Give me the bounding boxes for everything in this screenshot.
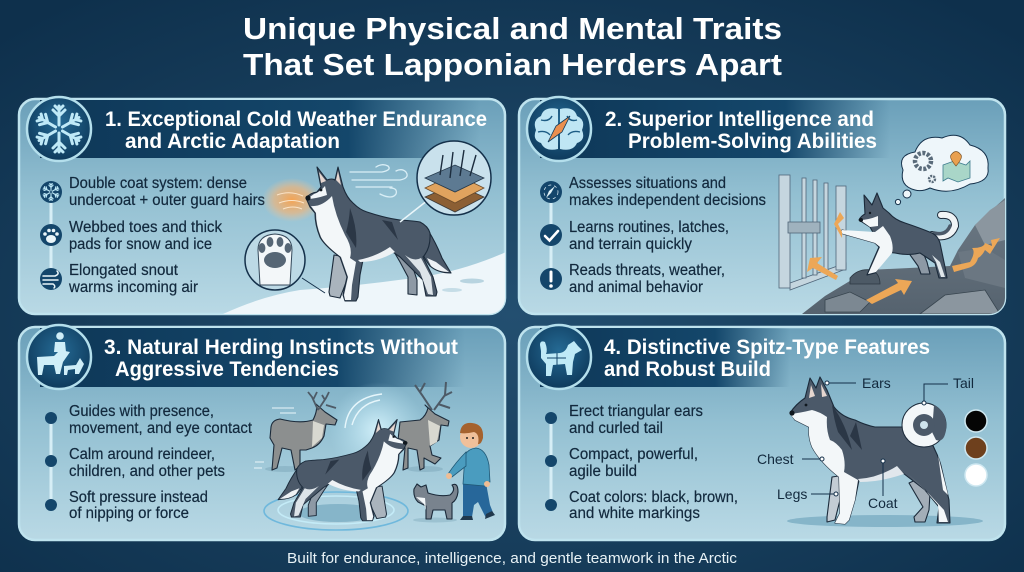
text block: children, and other pets: [69, 463, 225, 480]
reindeer left: [254, 392, 337, 472]
panel: herding instincts: [19, 325, 505, 540]
anatomy labels: [802, 381, 948, 496]
text block: makes independent decisions: [569, 192, 766, 209]
bullet timeline: [45, 412, 57, 511]
rocks: [802, 198, 1005, 316]
heading: and Robust Build: [604, 358, 771, 381]
heading: [105, 108, 487, 153]
bullet timeline: [545, 412, 557, 511]
panel: intelligence: [519, 97, 1005, 316]
heading: and Arctic Adaptation: [125, 130, 340, 153]
text block: and animal behavior: [569, 279, 703, 296]
ripple rings: [264, 492, 408, 530]
footer tagline: Built for endurance, intelligence, and gentle teamwork in the Arctic: [287, 550, 738, 567]
reindeer right: [398, 382, 452, 472]
text block: Webbed toes and thick: [69, 219, 222, 236]
text block: [569, 403, 738, 522]
text block: [569, 175, 766, 296]
text block: and white markings: [569, 505, 700, 522]
thought bubble: [895, 135, 988, 205]
heading: 4. Distinctive Spitz-Type Features: [604, 336, 930, 359]
text block: Erect triangular ears: [569, 403, 703, 420]
child: [446, 423, 495, 520]
bullet timeline: [540, 181, 562, 290]
text block: Soft pressure instead: [69, 489, 208, 506]
text block: Elongated snout: [69, 262, 179, 279]
text block: Reads threats, weather,: [569, 262, 725, 279]
text block: Double coat system: dense: [69, 175, 247, 192]
title: Unique Physical and Mental Traits: [243, 11, 782, 46]
calm halo: [329, 382, 425, 478]
text block: Compact, powerful,: [569, 446, 698, 463]
bullet timeline: [40, 181, 62, 290]
text block: Calm around reindeer,: [69, 446, 215, 463]
text block: pads for snow and ice: [69, 236, 212, 253]
text block: and curled tail: [569, 420, 663, 437]
header band: [40, 328, 465, 387]
heading: [104, 336, 458, 381]
dog reaching for latch: [840, 193, 955, 278]
heading: [604, 336, 930, 381]
callout: coat layers: [400, 141, 491, 222]
header band: [40, 100, 480, 158]
panel: spitz features: [519, 325, 1005, 540]
panel: spitz features: Coat: [868, 495, 898, 511]
icon: dog, person and pets: [27, 325, 91, 389]
heading: 1. Exceptional Cold Weather Endurance: [105, 108, 487, 131]
icon: brain and compass: [527, 97, 591, 161]
text block: Guides with presence,: [69, 403, 214, 420]
dog standing in snow: [305, 167, 451, 301]
text block: Coat colors: black, brown,: [569, 489, 738, 506]
panel: spitz features: Tail: [953, 375, 974, 391]
text block: Assesses situations and: [569, 175, 726, 192]
heading: Problem-Solving Abilities: [628, 130, 877, 153]
text block: [68, 175, 265, 296]
text block: movement, and eye contact: [69, 420, 253, 437]
text block: warms incoming air: [68, 279, 198, 296]
text block: [69, 403, 253, 522]
panel: spitz features: Chest: [757, 451, 794, 467]
coat colour swatches: [965, 410, 987, 486]
cat: [413, 484, 458, 522]
text block: undercoat + outer guard hairs: [69, 192, 265, 209]
icon: dog silhouette: [527, 325, 591, 389]
title: That Set Lapponian Herders Apart: [243, 47, 782, 82]
panel: spitz features: Ears: [862, 375, 891, 391]
panel: spitz features: Legs: [777, 486, 807, 502]
warm breath: [262, 178, 322, 222]
heading: 2. Superior Intelligence and: [605, 108, 874, 131]
heading: 3. Natural Herding Instincts Without: [104, 336, 458, 359]
text block: Learns routines, latches,: [569, 219, 729, 236]
wind lines: [350, 165, 407, 197]
panel: cold weather endurance: [19, 97, 506, 316]
labelled dog: [787, 377, 983, 527]
arrows: [807, 212, 1000, 304]
text block: agile build: [569, 463, 637, 480]
heading: [605, 108, 877, 153]
heading: Aggressive Tendencies: [115, 358, 339, 381]
text block: and terrain quickly: [569, 236, 692, 253]
dog walking: [278, 419, 407, 521]
gate with latch: [779, 175, 846, 290]
icon: snowflake: [27, 97, 91, 161]
callout: paw: [245, 230, 325, 293]
header band: [540, 100, 890, 158]
title: [243, 11, 782, 82]
snow ground: [223, 252, 506, 316]
curled tail: [902, 403, 946, 447]
text block: of nipping or force: [69, 505, 189, 522]
header band: [540, 328, 790, 387]
